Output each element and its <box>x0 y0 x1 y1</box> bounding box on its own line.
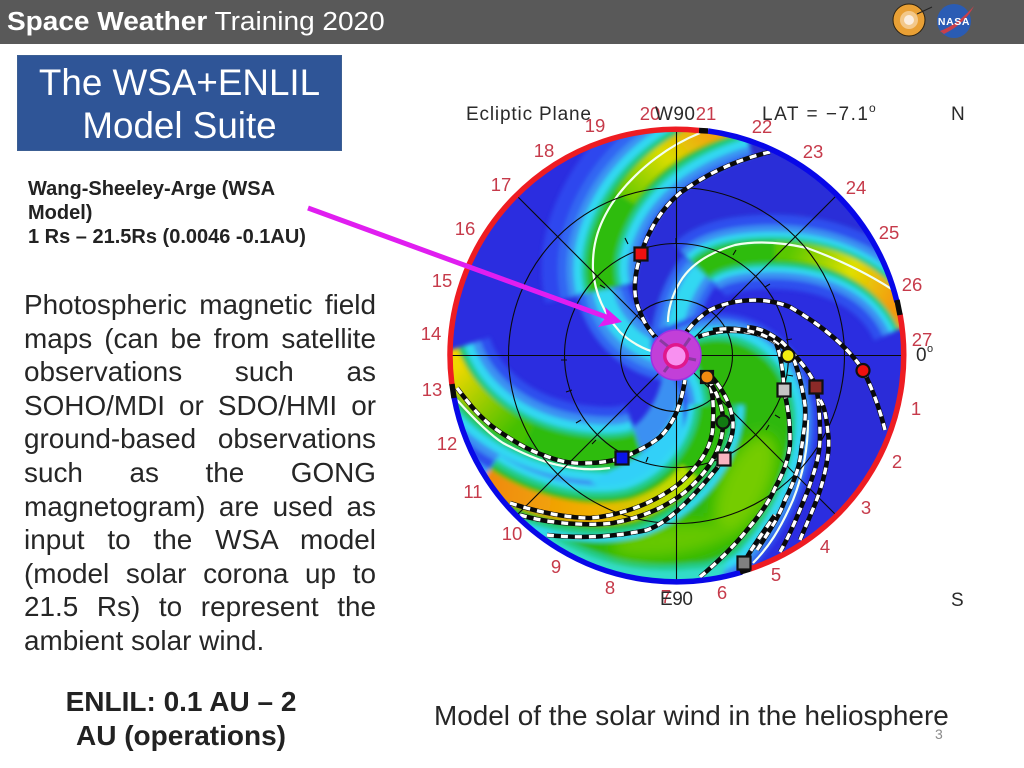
plot labels <box>466 101 965 611</box>
rim day numbers: 9 <box>551 556 561 577</box>
rim day numbers: 6 <box>717 582 727 603</box>
rim day numbers: 8 <box>605 577 615 598</box>
lower right green region <box>490 340 790 595</box>
wind band: upper left <box>601 120 742 355</box>
body text: photospheric magnetic field maps: observations such as <box>24 356 376 387</box>
body text: photospheric magnetic field maps: magnetogram) are used as <box>24 491 376 522</box>
rim day numbers: 3 <box>861 497 871 518</box>
rim day numbers: 5 <box>771 564 781 585</box>
rim day numbers: 10 <box>502 523 522 544</box>
body text: photospheric magnetic field maps: ambient solar wind. <box>24 625 264 656</box>
body text: photospheric magnetic field maps: such as the GONG <box>24 457 376 488</box>
rim day numbers: 18 <box>534 140 554 161</box>
title box <box>17 55 342 151</box>
plot labels: Ecliptic Plane <box>466 104 591 125</box>
rim day numbers: 4 <box>820 536 830 557</box>
rim day numbers: 25 <box>879 222 899 243</box>
rim day numbers: 26 <box>902 274 922 295</box>
solar wind disc <box>452 130 901 580</box>
body text: photospheric magnetic field maps: maps (can be from satellite <box>24 323 376 354</box>
plot labels: E90 <box>660 589 693 610</box>
rim day numbers: 20 <box>640 103 660 124</box>
body text: photospheric magnetic field maps: Photospheric magnetic field <box>24 289 376 320</box>
header title: Space Weather Training 2020 <box>7 8 385 36</box>
wind band: upper right <box>672 251 908 350</box>
plot labels: 0 <box>916 345 927 366</box>
disc rim <box>450 129 904 582</box>
ENLIL range text <box>66 686 296 751</box>
plot labels: o <box>869 101 876 115</box>
rim day numbers: 11 <box>463 481 483 502</box>
header bar <box>0 0 1024 44</box>
rim day numbers: 14 <box>421 323 441 344</box>
dashed CME fronts <box>457 152 885 577</box>
WSA model range subheading: 1 Rs – 21.5Rs (0.0046 -0.1AU) <box>28 226 306 248</box>
rim day numbers: 17 <box>491 174 511 195</box>
ENLIL range text: ENLIL: 0.1 AU – 2 <box>66 686 296 717</box>
wind band: left <box>446 352 685 453</box>
plot labels: N <box>951 104 965 125</box>
grid lines <box>445 125 905 586</box>
rim day numbers: 13 <box>422 379 442 400</box>
rim day numbers: 19 <box>585 115 605 136</box>
body text: photospheric magnetic field maps: ground-based observations <box>24 423 376 454</box>
body text: photospheric magnetic field maps <box>24 289 376 656</box>
white solid contours <box>457 133 893 563</box>
body text: photospheric magnetic field maps: input to the WSA model <box>24 524 376 555</box>
dark blue region inside red marker front <box>638 152 864 330</box>
wind band: lower left ribbon <box>484 405 716 514</box>
chart: ENLIL ecliptic plane solar wind model <box>307 106 964 606</box>
page number: 3 <box>935 726 943 742</box>
spacecraft and planet markers <box>616 248 870 570</box>
rim day numbers: 2 <box>892 451 902 472</box>
rim day numbers <box>421 103 932 607</box>
rim day numbers: 16 <box>455 218 475 239</box>
title box: Model Suite <box>82 105 277 146</box>
light blue region between left band and ribbon <box>478 458 494 478</box>
title box: The WSA+ENLIL <box>39 62 320 103</box>
rim day numbers: 23 <box>803 141 823 162</box>
body text: photospheric magnetic field maps: SOHO/MDI or SDO/HMI or <box>24 390 376 421</box>
rim day numbers: 12 <box>437 433 457 454</box>
WSA model range subheading: Wang-Sheeley-Arge (WSA <box>28 178 275 200</box>
plot labels: S <box>951 590 964 611</box>
rim day numbers: 15 <box>432 270 452 291</box>
WSA model range subheading <box>28 178 306 248</box>
rim day numbers: 27 <box>912 329 932 350</box>
ENLIL range text: AU (operations) <box>76 720 286 751</box>
rim day numbers: 1 <box>911 398 921 419</box>
plot labels: LAT = −7.1 <box>762 104 868 125</box>
rim day numbers: 7 <box>661 586 671 607</box>
central sun marker <box>651 330 701 380</box>
arrow: pointing to inner boundary <box>308 208 622 327</box>
rim day numbers: 21 <box>696 103 716 124</box>
caption: Model of the solar wind in the heliosphere <box>434 700 949 731</box>
cyan region below blue marker <box>590 398 686 488</box>
body text: photospheric magnetic field maps: (model solar corona up to <box>24 558 376 589</box>
WSA model range subheading: Model) <box>28 202 92 224</box>
icon: NASA logo: NASA <box>938 16 970 28</box>
rim day numbers: 24 <box>846 177 866 198</box>
icon: NASA logo <box>937 4 974 38</box>
plot labels: o <box>927 343 933 355</box>
rim day numbers: 22 <box>752 116 772 137</box>
body text: photospheric magnetic field maps: 21.5 Rs) to represent the <box>24 591 376 622</box>
icon: training program logo <box>892 4 932 36</box>
plot labels: W90 <box>655 104 695 125</box>
